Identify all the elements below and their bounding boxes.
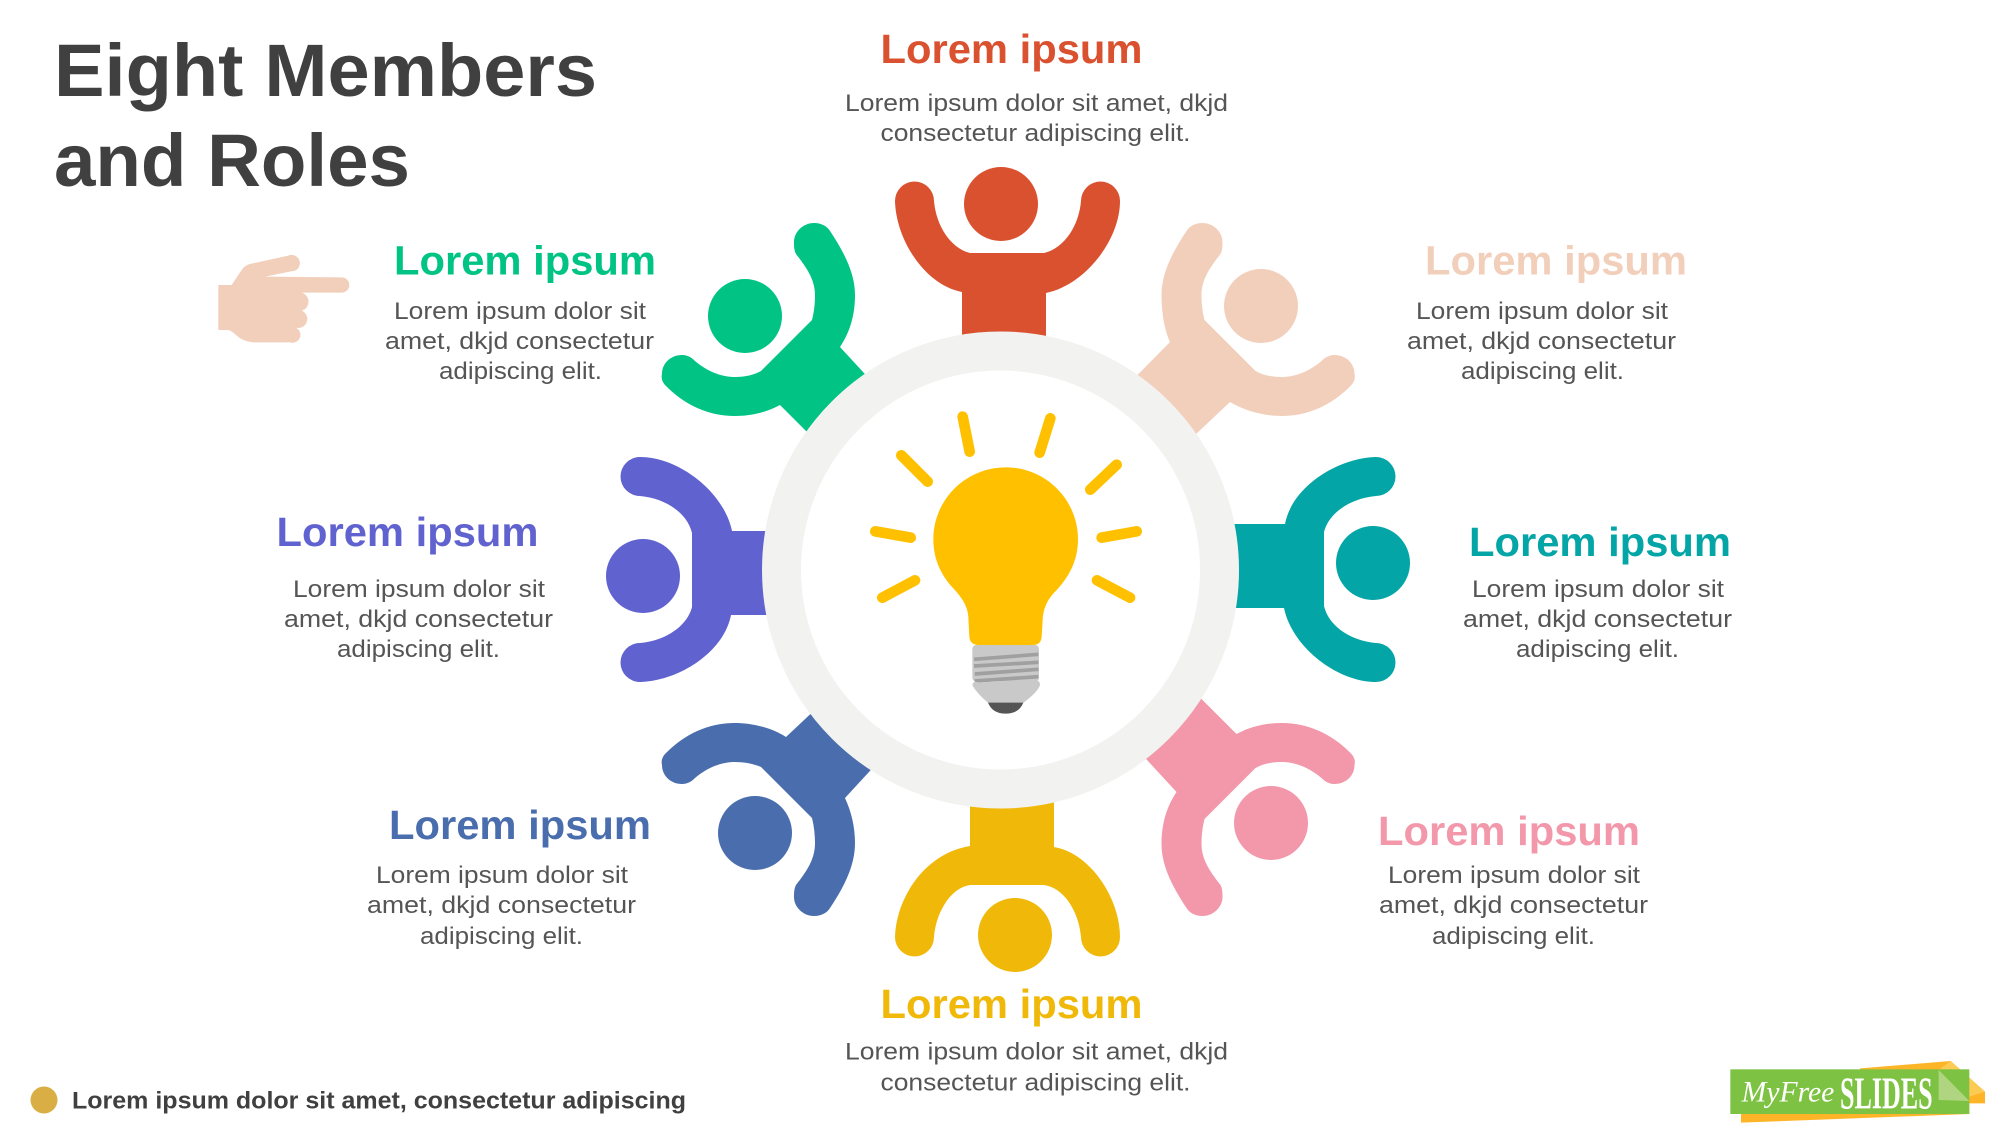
text block: pink xyxy=(1378,808,1648,950)
text block: teal xyxy=(1463,519,1732,663)
figure: teal member xyxy=(1232,457,1410,682)
bulb screw base xyxy=(972,645,1040,714)
logo: MyFree Slides xyxy=(1730,1061,1985,1123)
text block: teal: Lorem ipsum xyxy=(1469,519,1731,565)
text block: blue: Lorem ipsum xyxy=(389,802,651,848)
central ring xyxy=(782,351,1220,789)
text block: blue xyxy=(367,802,651,950)
text block: peach: adipiscing elit. xyxy=(1461,358,1624,385)
text block: red: Lorem ipsum dolor sit amet, dkjd xyxy=(845,90,1228,117)
bulb glass xyxy=(933,467,1078,645)
text block: peach: amet, dkjd consectetur xyxy=(1407,328,1676,355)
title: and Roles xyxy=(54,119,410,202)
icon: light bulb xyxy=(875,417,1137,714)
text block: pink: amet, dkjd consectetur xyxy=(1379,892,1648,919)
text block: green xyxy=(385,238,656,385)
title xyxy=(54,29,597,202)
text block: blue: adipiscing elit. xyxy=(420,923,583,950)
figure: red member xyxy=(895,167,1120,345)
text block: teal: adipiscing elit. xyxy=(1516,636,1679,663)
figure: peach member xyxy=(1128,223,1355,443)
text block: green: Lorem ipsum xyxy=(394,238,656,284)
logo: MyFree Slides: SLIDES xyxy=(1840,1068,1933,1118)
text block: peach xyxy=(1407,238,1687,385)
text block: red: consectetur adipiscing elit. xyxy=(880,120,1190,147)
text block: pink: Lorem ipsum dolor sit xyxy=(1388,862,1640,889)
text block: blue: Lorem ipsum dolor sit xyxy=(376,862,628,889)
figure: green member xyxy=(662,223,875,442)
text block: peach: Lorem ipsum dolor sit xyxy=(1416,298,1668,325)
text block: purple: Lorem ipsum dolor sit xyxy=(293,576,545,603)
text block: purple: Lorem ipsum xyxy=(276,509,538,555)
text block: peach: Lorem ipsum xyxy=(1425,238,1687,284)
text block: pink: Lorem ipsum xyxy=(1378,808,1640,854)
text block: green: Lorem ipsum dolor sit xyxy=(394,298,646,325)
logo: MyFree Slides: MyFree xyxy=(1741,1076,1834,1109)
text block: teal: Lorem ipsum dolor sit xyxy=(1472,576,1724,603)
text block: red xyxy=(845,26,1228,147)
footer note: Lorem ipsum dolor sit amet, consectetur adipiscing xyxy=(72,1088,686,1114)
text block: yellow: Lorem ipsum dolor sit amet, dkjd xyxy=(845,1038,1228,1066)
text block: red: Lorem ipsum xyxy=(880,26,1142,72)
figure: blue member xyxy=(662,705,880,916)
text block: blue: amet, dkjd consectetur xyxy=(367,892,636,919)
icon: pointing hand xyxy=(218,255,349,343)
bulb rays xyxy=(875,417,1137,598)
text block: purple: amet, dkjd consectetur xyxy=(284,606,553,633)
figure: purple member xyxy=(606,457,784,682)
text block: yellow: consectetur adipiscing elit. xyxy=(880,1070,1190,1096)
text block: teal: amet, dkjd consectetur xyxy=(1463,606,1732,633)
text block: green: amet, dkjd consectetur xyxy=(385,328,654,355)
text block: green: adipiscing elit. xyxy=(439,358,602,385)
text block: purple xyxy=(276,509,553,663)
text block: purple: adipiscing elit. xyxy=(337,636,500,663)
figure: yellow member xyxy=(895,795,1120,972)
text block: yellow xyxy=(845,981,1228,1096)
figure: pink member xyxy=(1142,697,1355,916)
text block: yellow: Lorem ipsum xyxy=(880,981,1142,1027)
text block: pink: adipiscing elit. xyxy=(1432,923,1595,950)
title: Eight Members xyxy=(54,29,597,112)
